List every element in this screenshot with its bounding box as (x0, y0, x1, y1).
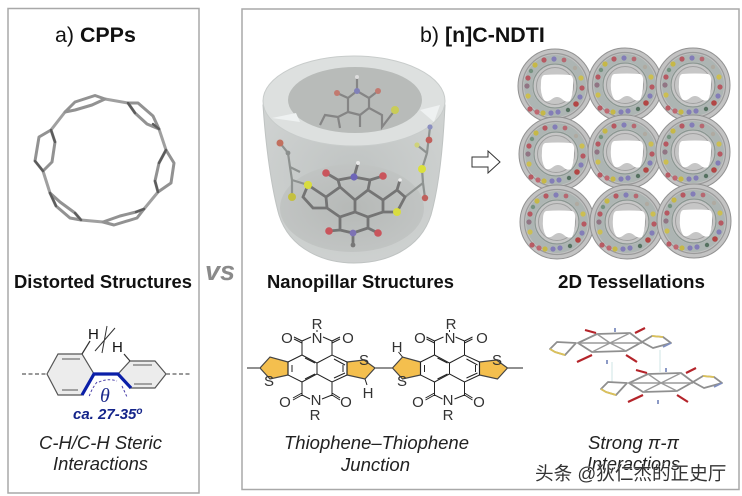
diagram: biphenyl dihedral angle with steric clash: o (136, 406, 142, 417)
caption: strong pi-pi interactions: Interactions (587, 453, 680, 474)
chemical structure: thiophene-thiophene junction: R (443, 407, 454, 424)
heading: Distorted Structures: Distorted Structures (14, 271, 192, 292)
chemical structure: thiophene-thiophene junction: N (312, 330, 322, 347)
vs label: vs (205, 256, 235, 286)
panel a border (8, 8, 199, 493)
chemical structure: thiophene-thiophene junction: H (392, 339, 402, 356)
panel: [n]C-NDTI (242, 9, 739, 490)
chemical structure: thiophene-thiophene junction: R (312, 316, 323, 333)
chemical structure: thiophene-thiophene junction: S (359, 352, 369, 369)
caption: C-H/C-H steric interactions: Interactions (53, 453, 148, 474)
2D tessellation grid (518, 48, 731, 259)
diagram: biphenyl dihedral angle with steric clash: H (88, 326, 99, 343)
chemical structure: thiophene-thiophene junction: O (414, 330, 426, 347)
chemical structure: thiophene-thiophene junction: O (476, 330, 488, 347)
diagram: biphenyl dihedral angle with steric clash (22, 326, 191, 423)
diagram: biphenyl dihedral angle with steric clash: H (112, 339, 123, 356)
chemical structure: thiophene-thiophene junction: S (492, 352, 502, 369)
caption: thiophene-thiophene junction: Junction (340, 454, 410, 475)
side molecule right (405, 124, 433, 201)
chemical structure: thiophene-thiophene junction: O (342, 330, 354, 347)
chemical structure: thiophene-thiophene junction (247, 316, 523, 424)
chemical structure: thiophene-thiophene junction: N (311, 392, 321, 409)
caption: C-H/C-H steric interactions (39, 432, 162, 474)
caption: strong pi-pi interactions: Strong π-π (588, 432, 680, 453)
heading: Nanopillar Structures: Nanopillar Structures (267, 271, 454, 292)
central ball-and-stick molecule (303, 161, 405, 247)
caption: C-H/C-H steric interactions: C-H/C-H Steric (39, 432, 162, 453)
CPP molecular ring model (35, 96, 174, 225)
second repeat unit (392, 330, 508, 400)
chemical structure: thiophene-thiophene junction: R (446, 316, 457, 333)
nanopillar cylinder with molecules (263, 56, 445, 263)
panel b border (242, 9, 739, 490)
chemical structure: thiophene-thiophene junction: N (445, 330, 455, 347)
diagram: biphenyl dihedral angle with steric clash: ca. 27-35 (73, 406, 136, 423)
caption: thiophene-thiophene junction (284, 432, 469, 475)
chemical structure: thiophene-thiophene junction: O (281, 330, 293, 347)
chemical structure: thiophene-thiophene junction: H (363, 385, 373, 402)
chemical structure: thiophene-thiophene junction: O (412, 394, 424, 411)
panel: CPPs (8, 8, 199, 493)
chemical structure: thiophene-thiophene junction: R (310, 407, 321, 424)
chemical structure: thiophene-thiophene junction: N (443, 392, 453, 409)
chemical structure: thiophene-thiophene junction: S (264, 373, 274, 390)
diagram: biphenyl dihedral angle with steric clash: θ (100, 385, 110, 407)
heading: 2D Tessellations: 2D Tessellations (558, 271, 705, 292)
chemical structure: thiophene-thiophene junction: S (397, 373, 407, 390)
watermark: 头条 @狄仁杰的正史厅 (535, 463, 726, 484)
chemical structure: thiophene-thiophene junction: O (340, 394, 352, 411)
chemical structure: thiophene-thiophene junction: O (473, 394, 485, 411)
caption: strong pi-pi interactions (587, 432, 680, 474)
arrow to tessellation (472, 151, 500, 173)
heading: b) [n]C-NDTI: b) [n]C-NDTI (420, 23, 545, 47)
heading: a) CPPs: a) CPPs (55, 23, 136, 47)
stacked molecules: pi-pi interaction (550, 328, 722, 404)
side molecule left (276, 140, 312, 201)
chemical structure: thiophene-thiophene junction: O (279, 394, 291, 411)
caption: thiophene-thiophene junction: Thiophene–Thiophene (284, 432, 469, 453)
